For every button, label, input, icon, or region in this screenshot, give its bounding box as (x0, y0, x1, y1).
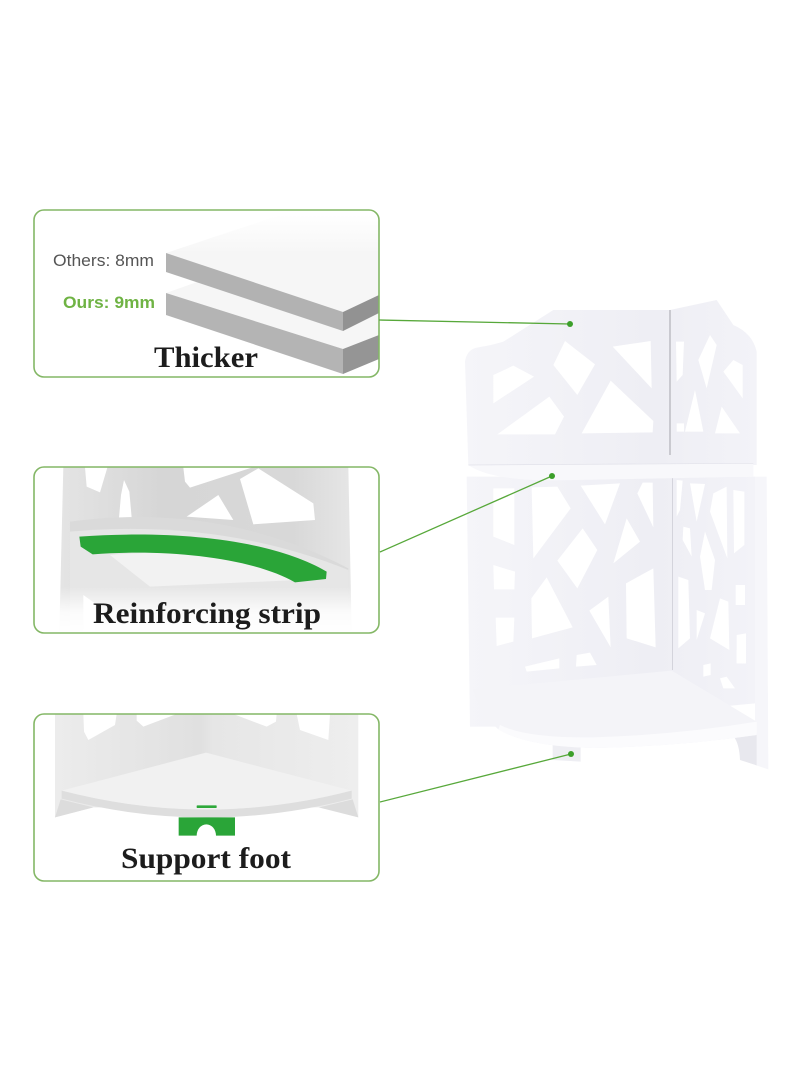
lower board 9mm (166, 281, 380, 374)
panel: thicker (34, 210, 380, 377)
board comparison illustration (166, 250, 378, 374)
green support foot (179, 817, 235, 836)
panel border (34, 467, 379, 633)
callout line: thicker to top panel (379, 320, 573, 327)
caption: Support foot: Support foot (121, 842, 291, 875)
middle shelf board (468, 463, 753, 480)
green foot slot (197, 805, 217, 808)
label: others 8mm: Others: 8mm (53, 252, 154, 270)
product: white corner shelf (465, 300, 768, 769)
label: ours 9mm: Ours: 9mm (63, 294, 155, 312)
caption: Reinforcing strip: Reinforcing strip (93, 597, 321, 630)
panel border (34, 714, 379, 881)
shelf base illustration (55, 714, 358, 836)
shelf upper back panels (465, 300, 757, 465)
panel: reinforcing strip (34, 467, 379, 633)
green reinforcing strip (79, 535, 327, 582)
panel border (34, 210, 379, 377)
bottom shelf board and feet (473, 650, 757, 765)
caption: Thicker: Thicker (154, 341, 258, 374)
callout line: support foot to foot (380, 751, 574, 802)
callout line: reinforcing strip to middle shelf (380, 473, 555, 552)
shelf underside illustration (60, 468, 351, 608)
upper board 8mm (166, 250, 378, 331)
shelf lower panels (467, 477, 768, 769)
panel: support foot (34, 714, 379, 881)
